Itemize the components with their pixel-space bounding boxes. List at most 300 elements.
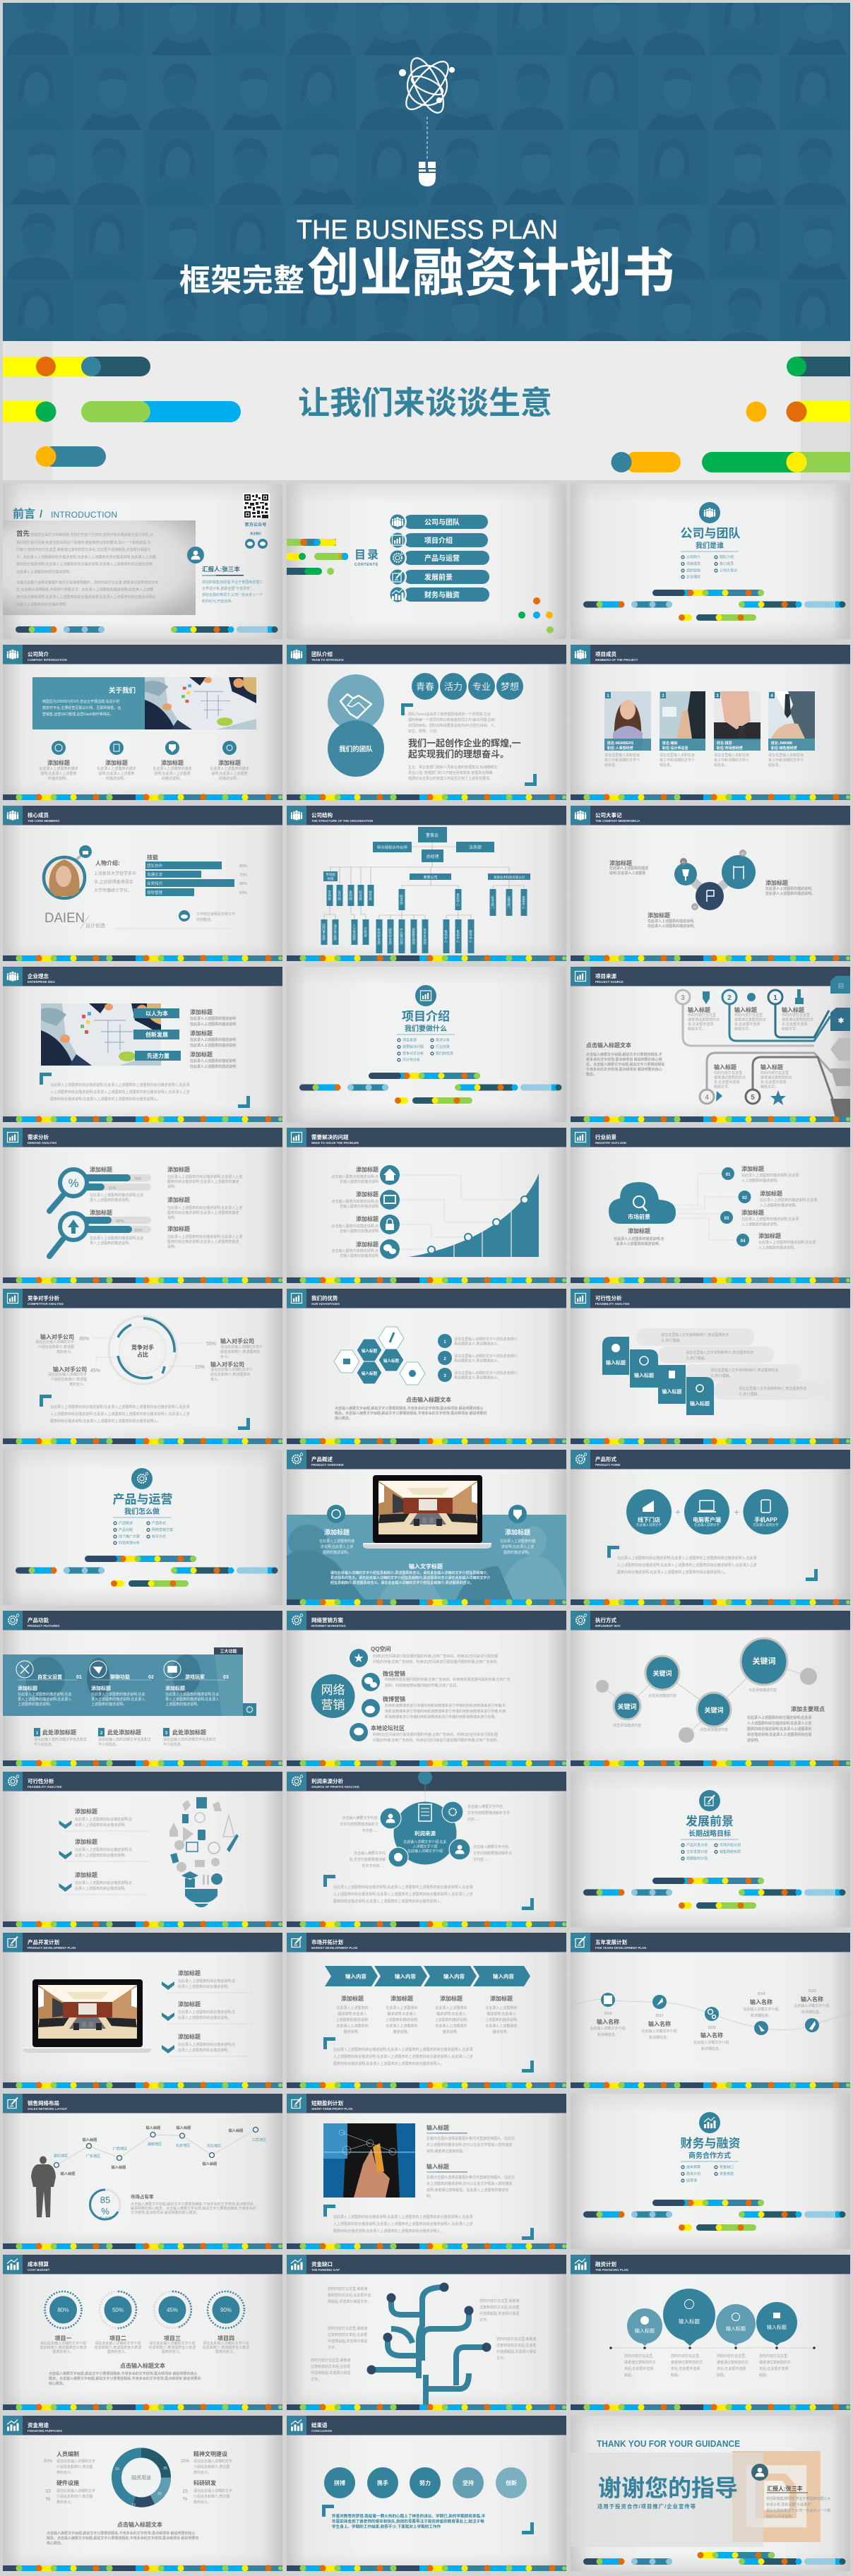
slide header: FINANCING PURPOSES <box>28 2429 62 2433</box>
tree note 3: 您的内容打在这里,或者通 <box>328 2326 367 2331</box>
icon column 3: 说明,在此录入上述图表 <box>154 771 191 776</box>
channel Weibo <box>362 1695 506 1719</box>
step tab 2: 输入标题 <box>634 1372 654 1378</box>
feature right: 述说明,在此录入上述 <box>501 1544 534 1549</box>
channel Weibo: 新浪微博来进行传播利用新浪微博来进行传播利用新浪微博来进行传播。 <box>385 1715 498 1719</box>
chevron process: 输入内容 <box>345 1973 366 1980</box>
heading: thanks: 谢谢您的指导 <box>598 2475 738 2501</box>
text block: responsibility: 企业、事业各部门组织人员有合格的管理意识,有战略眼光, <box>408 765 499 770</box>
agenda list: 结束语 <box>686 2178 697 2183</box>
allocation 1 <box>44 2450 95 2475</box>
closing text: 学生身上。学期的工作结束,收获不少,下面我对上学期的工作作 <box>332 2524 441 2529</box>
left text block: 念。点击输入摘要文字标题,解说文字只要概括精炼 <box>586 1062 664 1067</box>
competitor 3: 介绍信息和简介,表述图 <box>51 1377 87 1382</box>
share text: 市场占有率 <box>131 2195 154 2200</box>
left text block: 用多余的文字修饰,需点睛项目 解说明要的核心概 <box>586 1057 662 1062</box>
text column: 添加标题 <box>167 1196 190 1203</box>
donut chart <box>109 1316 177 1384</box>
milestone 2019: 输入名称 <box>750 1998 773 2005</box>
step tab 3 <box>658 1365 686 1404</box>
text block: intro: 在此录入上述图表的综合描述说明。 <box>16 569 73 575</box>
plan item 2: 添加标题 <box>178 2000 201 2008</box>
column 4: 描述说明。 <box>492 2029 511 2034</box>
step text upper: 本,在此框中选择 <box>782 1022 807 1027</box>
item labels: 项目四 <box>217 2335 234 2342</box>
text block: intro: 后,在此框中选择粘贴,并选择只保留文字。在此录入上述图表的描述说明,在此录入上述图 <box>16 588 153 592</box>
icon: section badge <box>699 2112 720 2133</box>
step text upper: 粘贴文字。 <box>734 1027 752 1031</box>
keyword captions: 点击添加描述内容 <box>748 1688 777 1693</box>
note left top: 点击输入摘要文字内容, <box>342 1815 378 1820</box>
item 3: 在此录入上述图表的综合描述说明,在 <box>75 1880 132 1885</box>
balloon 4 <box>756 2302 797 2346</box>
slide: section product <box>3 1450 282 1605</box>
menu item 2 <box>388 531 488 549</box>
panel: features band: 添加标题 <box>165 1685 185 1691</box>
agenda list: 利润来源分析 <box>119 1541 140 1545</box>
plan item 1: 此录入上述图表的综合描述说明。 <box>178 1984 231 1989</box>
text column: 图表的综合描述说明,在此录入上述图表的描述 <box>167 1179 239 1184</box>
note text: 义,的行理解。 <box>661 1338 683 1343</box>
agenda list: 成本预算 <box>686 2165 700 2169</box>
menu item 4: 发展前景 <box>424 573 453 582</box>
magnifier chart 2: 40% <box>116 1220 124 1224</box>
text block: responsibility: 根据针对企事业的管理工作是否达到了上述责任要求。 <box>408 776 493 781</box>
slide: product form <box>571 1450 850 1605</box>
text block: intro: 感谢您在百忙之中审阅我,当您打开这个文件时,您将开始对我的能力进行评估,对 <box>30 532 153 537</box>
allocation 4: 请在此处输入详细的文字 <box>193 2488 232 2493</box>
channel Weibo: 微博营销 <box>383 1695 405 1703</box>
milestone 2017 <box>641 1995 678 2040</box>
panel: features band <box>3 1654 243 1716</box>
tab: three functions <box>214 1647 243 1654</box>
item text: 图表的含义。 <box>52 2349 74 2354</box>
column 2: 描述说明。 <box>393 2029 411 2034</box>
item text <box>40 2341 249 2354</box>
idea text 2: 在此录入上述图表的描述说明 <box>190 1043 236 1048</box>
tree note 2: 文字。 <box>479 2318 490 2322</box>
heading: preface: 前言 <box>13 507 35 520</box>
competitor 1 <box>35 1333 114 1354</box>
text block 2: 右键点击图片选择设置图片格式可直接替换图片。在此文 <box>426 2175 515 2180</box>
slide: market development plan <box>287 1933 566 2088</box>
allocation 2: 硬件设施 <box>56 2479 79 2486</box>
menu item 2: 项目介绍 <box>424 536 453 545</box>
slide header: 项目来源 <box>595 973 616 979</box>
panel: banner background <box>3 341 850 480</box>
reporter info: 大学设计系,曾获全国“十佳青年”, <box>202 586 252 591</box>
banner headline: 让我们来谈谈生意 <box>298 385 552 421</box>
magnifier chart 2: 60% <box>134 1229 143 1233</box>
allocation 1: 请在此处输入详细的文字 <box>56 2459 95 2464</box>
bracket <box>40 1395 52 1407</box>
left text block: 不用多余的文字修饰,需点睛项目 解说明要的核心 <box>586 1067 662 1072</box>
color strip <box>571 955 850 962</box>
item text: 请在此处输入详细的文字介绍 <box>149 2341 196 2346</box>
share text: 点击输入摘要文字标题,解说文字只要概括精炼,不用多余的文字修饰,需点睛项目 <box>131 2202 253 2207</box>
chart notes: 添加标题 <box>90 1166 112 1173</box>
share gauge <box>90 2190 120 2221</box>
step text lower: 粘贴文字。 <box>760 1085 778 1089</box>
text block 2 <box>426 2163 515 2199</box>
reporter info: 汇报人:张三丰 <box>202 566 240 573</box>
org chart: 软件研发部 <box>377 928 381 946</box>
keyword circles: 梦想 <box>501 681 519 692</box>
allocation 3: 精神文明建设 <box>193 2450 227 2457</box>
feature note 2: 此处添加标题 <box>107 1729 141 1736</box>
item 1 <box>59 1808 150 1831</box>
item text: 请在此处输入详细的文字介绍 <box>203 2341 249 2346</box>
plan item 3: 在此录入上述图表的综合描述说明,在 <box>178 2042 235 2047</box>
person intro text: 大学传播硕士学位。 <box>94 888 132 893</box>
text column 3: 您的内容打在这里, <box>717 2354 746 2359</box>
column 2: 添加标题 <box>390 1995 413 2002</box>
allocation 3: 表的含义。 <box>193 2470 211 2475</box>
form circle 3: 在此输入说明文字 <box>753 1522 779 1527</box>
bracket <box>806 1569 818 1581</box>
balloon 1 <box>627 2308 662 2346</box>
form circle 1 <box>626 1489 672 1534</box>
point 02: 在此录入上述图表的描述说明,在此录 <box>760 1198 817 1203</box>
note 3: 添加标题 <box>648 912 670 919</box>
agenda list: 产品开发计划 <box>686 1843 708 1847</box>
advantage 1: 1 <box>443 1340 446 1344</box>
chart notes: 录入上述图表的描述说明。 <box>90 1198 132 1203</box>
org chart: 售后中心 <box>456 893 460 907</box>
wavy timeline <box>571 1999 850 2030</box>
member card 2: 职位:设计师总监 <box>662 746 688 751</box>
feature note 2: 2 <box>100 1731 103 1736</box>
column 1: 在此录入上述图表的 <box>336 2005 369 2010</box>
member card 3: 职位:市场部经理 <box>717 746 743 751</box>
slide header: NEED TO SOLVE THE PROBLEM <box>311 1141 359 1145</box>
org chart <box>321 827 530 953</box>
note right bottom: 字内容...... <box>473 1857 489 1862</box>
slide header: THE FUNDING GAP <box>311 2268 340 2272</box>
item text: 请在此处输入详细的文字介绍 <box>95 2341 141 2346</box>
allocation 2: 10 <box>45 2489 51 2494</box>
agenda list <box>398 1038 453 1062</box>
text column: 说明。 <box>167 1215 178 1220</box>
slide: source of profits <box>287 1772 566 1927</box>
dotted connectors <box>655 1174 738 1240</box>
skill bars: 业务知识 <box>147 881 163 886</box>
note right bottom: 点击输入摘要文字内容, <box>473 1844 509 1849</box>
color strip <box>287 1599 566 1606</box>
bracket <box>522 1898 534 1910</box>
slide: preface introduction <box>3 484 282 639</box>
region labels: 北京地区 <box>176 2142 190 2148</box>
form circle 1: 在此输入说明文字 <box>636 1522 662 1527</box>
step tab 1 <box>602 1337 629 1375</box>
text block 2: 输入标题 <box>426 2163 449 2170</box>
milestone 2020 <box>794 1989 830 2032</box>
flow lines <box>683 1005 833 1101</box>
text block 1: 输入标题 <box>426 2124 449 2131</box>
point 01: 在此录入上述图表的描述说明,在此录 <box>741 1173 799 1178</box>
gauge 1 <box>45 2291 82 2328</box>
member card 2: 绍信息。 <box>660 763 674 768</box>
competitor 1: 35% <box>79 1337 89 1342</box>
milestone 2017: 在此输入详细文字介绍, <box>641 2029 678 2034</box>
decorative bars <box>583 2200 846 2231</box>
section subtitle: 我们怎么做 <box>124 1507 160 1516</box>
menu item 3: 产品与运营 <box>424 554 460 563</box>
column 2: 描述说明,在此录入 <box>387 2011 417 2017</box>
color strip <box>3 1438 282 1445</box>
skill bars: 技能 <box>147 854 158 861</box>
agenda list: 资金用途 <box>720 2171 734 2176</box>
magnifier chart 2 <box>49 1213 151 1256</box>
area growth chart <box>409 1174 539 1257</box>
skill bars: 95% <box>239 882 247 886</box>
icon column 1: 添加标题 <box>47 759 70 766</box>
agenda list: 项目来源 <box>402 1038 417 1042</box>
competitor 3: 45% <box>90 1368 100 1373</box>
color strip <box>3 955 282 962</box>
text block: intro: 此录入上述图表的综合描述说明。 <box>16 602 69 607</box>
member card 4: 请在这里输入本职位目 <box>768 753 804 758</box>
quote text: 在此录入上述图表的综合描述说明,在此录入上述图表的上述图表的综合描述说明入,在此录 <box>50 1083 190 1087</box>
slide header: SALES NETWORK LAYOUT <box>28 2107 68 2111</box>
reporter info <box>766 2485 830 2520</box>
quote text: 入上述图表的综合描述说明,在此录入上述图表的上述图表的综合描述说明入,在此录入上述 <box>617 1563 757 1568</box>
heading: english title: THE BUSINESS PLAN <box>297 215 558 245</box>
node titles: 输入标题 <box>177 2125 191 2130</box>
keyword network: 关键词 <box>652 1669 672 1677</box>
color strip <box>287 2243 566 2250</box>
value circles: 创新 <box>506 2479 517 2486</box>
menu item 3 <box>388 549 489 567</box>
panel: grey overlay <box>571 2452 763 2547</box>
slide: sales network layout <box>3 2094 282 2249</box>
note right top: 文字内容概要描述解析文字 <box>467 1811 510 1815</box>
slide header: 核心成员 <box>28 812 49 818</box>
agenda list: 资金缺口 <box>720 2165 734 2169</box>
slide header: PRODUCT DEVELOPMENT PLAN <box>28 1946 76 1950</box>
icon: QR code <box>243 493 270 519</box>
chart notes: 录入上述图表的描述说明。 <box>90 1241 132 1246</box>
problem 2: 击输入图表内容描述说明 <box>340 1204 378 1209</box>
balloon 2 <box>663 2289 715 2346</box>
slide: project source <box>571 967 850 1122</box>
share gauge: 输入标题 <box>99 2216 112 2221</box>
point 01 <box>722 1165 799 1183</box>
slide header: 结束语 <box>311 2422 328 2428</box>
org chart: 硬件研发部 <box>388 928 393 946</box>
step text upper: 本,在此框中选择 <box>734 1022 760 1027</box>
agenda list: 市场开拓计划 <box>720 1843 741 1847</box>
column 4: 上述图表的描述说明, <box>485 2017 518 2022</box>
org chart: 某某技术科技有限公司 <box>494 875 525 880</box>
profit source bubbles <box>380 1801 470 1867</box>
magnifier chart 1: 31% <box>108 1186 117 1191</box>
channel WeChat: 目的。利用微信朋友圈问题的传播,达到广告目。 <box>385 1683 460 1688</box>
main point: 入上述图表的综合描述说明,在此录入上述 <box>747 1721 811 1726</box>
step text upper <box>688 1006 813 1031</box>
note text: 义,的行理解。 <box>710 1373 732 1378</box>
step text lower: 输入标题 <box>760 1063 783 1071</box>
plan item 3 <box>162 2033 253 2056</box>
step text upper: 本,在此框中选择 <box>688 1022 713 1027</box>
channel QQ: QQ空间 <box>371 1645 390 1652</box>
section subtitle: 我们要做什么 <box>405 1024 447 1033</box>
text column: 说明。 <box>167 1184 178 1189</box>
gauge 3: 45% <box>167 2307 178 2313</box>
node titles: 输入标题 <box>112 2164 126 2170</box>
org chart: 服务中心 <box>469 930 473 943</box>
channel forum: 利用QQ空间来进行朋友圈问题的传播,达到广告目的。利用QQ空间来进行朋友圈 <box>373 1732 498 1737</box>
point 01: 01 <box>726 1173 731 1177</box>
panel: features band: 01 <box>76 1675 82 1680</box>
slide: implement way <box>571 1611 850 1766</box>
decorative bars <box>16 626 278 633</box>
competitor 4: 15% <box>195 1365 205 1370</box>
slide header: INDUSTRY OUTLOOK <box>595 1141 627 1145</box>
allocation 2: 介绍信息和简介,表达图 <box>56 2494 93 2499</box>
reporter info: 汇报人:张三丰 <box>767 2485 803 2492</box>
reporter info: 相信在我的带领下,公司一定会步入一个 <box>202 592 263 597</box>
allocation 1: 50% <box>44 2459 53 2464</box>
slide: organization chart <box>287 806 566 961</box>
agenda list: 产品形式 <box>152 1521 166 1525</box>
feature note 3 <box>163 1728 216 1747</box>
problem 4: 点击输入图表内容描述说明,点 <box>332 1248 378 1253</box>
agenda list: 可行性分析 <box>402 1058 420 1062</box>
feature note 2: 请在此输入您的详细文字信息和文 <box>98 1737 151 1742</box>
icon column 2 <box>97 741 136 781</box>
quote text: 入上述图表的综合描述说明,在此录入上述图表的上述图表的综合描述说明入,在此录入上述 <box>50 1090 190 1095</box>
menu item 4 <box>388 568 489 586</box>
feature note 1 <box>34 1728 87 1747</box>
quote text: 入上述图表的综合描述说明,在此录入上述图表的上述图表的综合描述说明入,在此录入上述 <box>333 2222 473 2226</box>
bracket <box>607 1546 619 1558</box>
menu item 1 <box>388 513 488 531</box>
allocation 1: 人员编制 <box>56 2450 79 2457</box>
member card 4: 职位:销售部经理 <box>771 746 797 751</box>
slide header: 资金缺口 <box>311 2261 333 2267</box>
band text: 输入文字标题 <box>409 1563 443 1570</box>
work note <box>179 910 235 922</box>
slide: company memorabilia <box>571 806 850 961</box>
color strip <box>3 2565 282 2572</box>
color strip <box>571 2404 850 2411</box>
person intro text <box>94 859 136 893</box>
color strip <box>3 1277 282 1284</box>
note 2: 在此录入上述图表的描述说明, <box>765 886 813 891</box>
org chart: 综合部 <box>359 890 363 901</box>
text column 1: 粘贴。 <box>624 2373 635 2378</box>
decorative bars left <box>287 539 348 575</box>
hexagon cluster <box>334 1327 425 1385</box>
org chart: 售前中心 <box>444 929 448 943</box>
balloon 4: 输入标题 <box>767 2324 787 2330</box>
problem 3: 击输入图表内容描述说明 <box>340 1229 378 1234</box>
feature note 3: 请在此输入您的详细文字信息和文 <box>163 1737 216 1742</box>
slide header: 公司简介 <box>28 651 49 657</box>
point 03: 在此录入上述图表的描述说明,在此录 <box>741 1217 799 1222</box>
column 4: 添加标题 <box>490 1995 513 2002</box>
keyword captions <box>613 1688 777 1732</box>
note 3: 在此录入上述图表的描述说明。 <box>648 924 697 929</box>
slide header: COMPANY INTRODUCTION <box>28 658 67 662</box>
icon column 4: 的描述说明。 <box>219 776 240 781</box>
tree note 1: 您的内容打在这里,或者通 <box>328 2286 367 2291</box>
slide header: 需要解决的问题 <box>311 1134 349 1140</box>
decorative bars <box>299 1073 562 1104</box>
side tabs <box>830 976 850 1118</box>
text block 2: 本上述图表的描述说明,您可以在此文字框输入您的描述 <box>426 2181 512 2186</box>
icon: section badge <box>131 1468 153 1489</box>
donut chart: 竞争对手 <box>131 1344 154 1351</box>
node titles: 输入标题 <box>229 2128 244 2133</box>
icon column 3 <box>153 741 192 781</box>
milestone 2018: 和详细信息。 <box>701 2046 722 2051</box>
central badge: 营销 <box>321 1698 345 1712</box>
tree note 5: 中选择粘贴,并选择只保留 <box>311 2371 350 2375</box>
form circle 3 <box>743 1489 788 1534</box>
feature note 1: 1 <box>36 1731 39 1736</box>
summary text: 点击输入摘要文字标题,解说文字只要概括精炼,不用多余的文字修饰,需点睛项目 解说明要的核心 <box>49 2371 198 2376</box>
item labels: 项目三 <box>164 2335 181 2342</box>
icon column 4: 说明,在此录入上述图表 <box>211 771 248 776</box>
hexagon cluster: 输入标题 <box>383 1358 399 1364</box>
slide header: PRODUCT OVERVIEW <box>311 1463 344 1467</box>
competitor 1: 介绍信息和简介,表述图 <box>38 1344 74 1349</box>
agenda list: 企业理念 <box>686 575 700 579</box>
competitor 2: 绍信息和简介,表述图表的 <box>220 1349 260 1354</box>
advantage 2: 请在这里输入详细的文字介绍信息和简介, <box>454 1354 518 1359</box>
icon: section badge <box>415 985 436 1006</box>
slide header: SHORT-TERM PROFIT PLAN <box>311 2107 352 2111</box>
point 03: 添加标题 <box>741 1209 764 1216</box>
slide header: 市场开拓计划 <box>311 1939 343 1945</box>
bracket <box>401 703 413 715</box>
text block: team description: 理利用每一个成员的知识和技能协同工作,解决问题,达到 <box>408 717 495 722</box>
org chart: 国内事业部 <box>322 924 326 941</box>
text column 4: 本后,在此框中选择 <box>759 2366 788 2371</box>
tree note 1: 复制您的文本后,在此框中选 <box>328 2293 371 2298</box>
step tab 1: 输入标题 <box>606 1359 626 1366</box>
slide header: 可行性分析 <box>28 1778 54 1784</box>
value circles: 携手 <box>377 2479 388 2486</box>
band text: 绍信息和简介,表述图表的含义。请在此处输入详细的文字介绍信息和简介,表述图表的含义。 <box>330 1580 474 1585</box>
slide: short term profit plan <box>287 2094 566 2249</box>
problem 1: 添加标题 <box>356 1166 378 1173</box>
icon column 3: 的描述说明。 <box>162 776 183 781</box>
balloon 3 <box>716 2304 756 2346</box>
person intro text: 业,之后取得香港浸会 <box>94 879 133 885</box>
allocation 4: % <box>183 2497 187 2502</box>
summary text: 点击输入标题文本 <box>406 1397 451 1403</box>
heading: contents: CONTENTS <box>354 563 378 567</box>
agenda list: 融资计划 <box>686 2171 700 2176</box>
color strip <box>571 1599 850 1606</box>
signature: DAIEN <box>44 911 85 926</box>
reporter info: 学设计系,曾获全国“十佳青年”, <box>766 2503 813 2507</box>
member card 3 <box>714 691 760 768</box>
milestone 2018 <box>693 2007 730 2051</box>
slide: financing purposes <box>3 2416 282 2571</box>
text column 2: 本后,在此框中选择 <box>671 2366 700 2371</box>
color strip <box>571 1116 850 1123</box>
color strip <box>571 2082 850 2089</box>
feature note 3: 字介绍信息。 <box>163 1742 184 1747</box>
chevron process: 输入内容 <box>493 1973 514 1980</box>
feature note 3: 此处添加标题 <box>172 1729 206 1736</box>
milestone 2016: 和详细信息。 <box>597 2032 619 2037</box>
channel WeChat: 微信营销 <box>383 1670 405 1677</box>
